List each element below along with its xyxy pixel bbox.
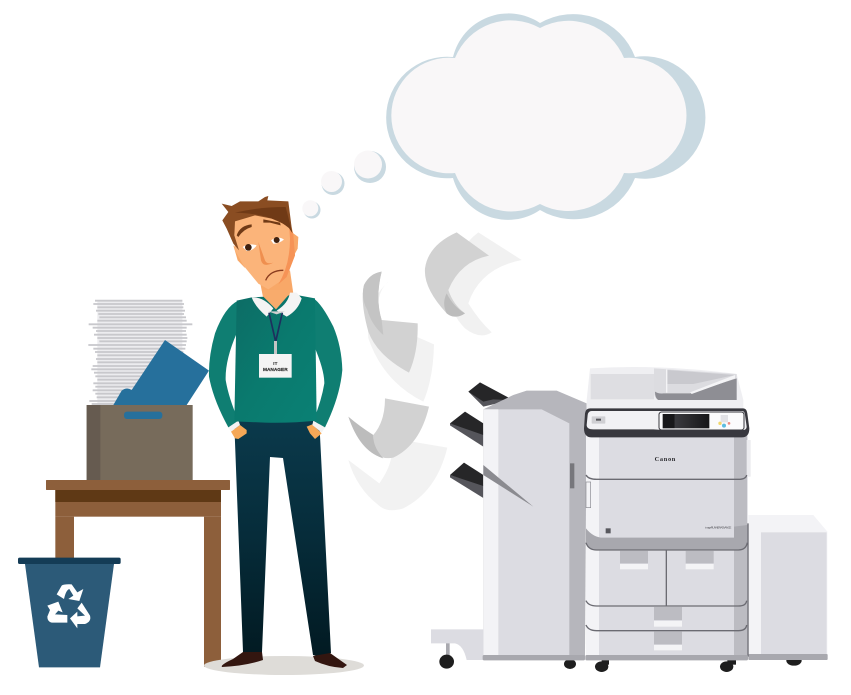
- touch screen: [663, 414, 709, 428]
- right cuff: [312, 421, 325, 433]
- brand: Canon: [655, 456, 676, 463]
- blue folder: [113, 340, 209, 405]
- body panel lines: [586, 475, 748, 657]
- collar: [252, 293, 302, 317]
- small square: [606, 528, 611, 533]
- hair shadow: [235, 207, 292, 233]
- left eye: [243, 244, 257, 251]
- paper lower light: [348, 441, 447, 510]
- head: [222, 196, 298, 307]
- paper left fold: [363, 272, 383, 335]
- neck: [263, 290, 290, 309]
- name badge: MANAGER: [263, 367, 288, 373]
- hair: [222, 196, 292, 250]
- thought cloud: [302, 13, 705, 220]
- finisher base foot: [431, 629, 485, 669]
- lanyard clip: [274, 341, 277, 354]
- man: [204, 196, 364, 675]
- cloud face: [391, 20, 686, 211]
- right eyebrow: [263, 219, 281, 225]
- ground shadow: [204, 656, 364, 675]
- wheels: [564, 656, 802, 672]
- output tray middle: [450, 412, 483, 447]
- paper top right light: [447, 232, 522, 335]
- trousers: [234, 416, 331, 656]
- stack of papers, box, table: [18, 300, 230, 667]
- left cuff: [228, 420, 240, 432]
- recycling symbol: [47, 584, 90, 628]
- paper lower fold: [348, 417, 383, 458]
- grey band: [586, 525, 747, 550]
- left eyebrow: [237, 224, 252, 237]
- thought bubble large: [354, 150, 386, 183]
- printer: [431, 367, 828, 672]
- paper left grey: [363, 272, 418, 373]
- paper lower grey: [373, 398, 429, 458]
- cardboard box: [87, 405, 193, 480]
- cloud shadow: [386, 13, 705, 220]
- right hand: [307, 424, 322, 439]
- paper top right fold: [444, 293, 465, 317]
- keypad: [718, 415, 730, 428]
- main body: [585, 435, 751, 660]
- output tray top: [468, 382, 527, 407]
- left shoe: [222, 652, 263, 667]
- model label: imageRUNNER ADVANCE: [705, 525, 731, 529]
- right sleeve: [313, 298, 342, 427]
- torso: [234, 295, 317, 423]
- right shoe: [313, 653, 347, 668]
- left hand: [231, 425, 247, 439]
- name badge: [259, 354, 292, 378]
- lanyard: [269, 313, 282, 342]
- paper top right grey: [425, 232, 489, 317]
- scanner lid: [587, 367, 743, 410]
- paper left light: [368, 281, 434, 402]
- box handle: [124, 412, 162, 419]
- left ear: [233, 245, 245, 268]
- right eye: [271, 237, 284, 244]
- recycling bin: [18, 558, 121, 667]
- screen frame: [659, 412, 744, 430]
- drawer grips: [620, 551, 714, 650]
- name badge: IT: [273, 361, 278, 367]
- control panel: [584, 408, 749, 437]
- table: [46, 480, 230, 667]
- finisher: [483, 391, 587, 660]
- face: [233, 209, 295, 289]
- power button: [592, 416, 605, 424]
- side paper deck: [748, 515, 828, 660]
- door handle: [586, 482, 591, 508]
- thought bubble medium: [321, 171, 344, 195]
- thought bubble small: [302, 200, 320, 218]
- flying papers: [348, 232, 522, 510]
- paper stack: [88, 300, 192, 405]
- right ear: [292, 233, 298, 256]
- output tray bottom: [450, 463, 483, 498]
- sweater: [209, 290, 342, 439]
- left sleeve: [209, 301, 238, 427]
- face shade: [278, 224, 295, 284]
- nose: [258, 242, 273, 265]
- mouth: [266, 270, 283, 280]
- throat: [260, 270, 293, 307]
